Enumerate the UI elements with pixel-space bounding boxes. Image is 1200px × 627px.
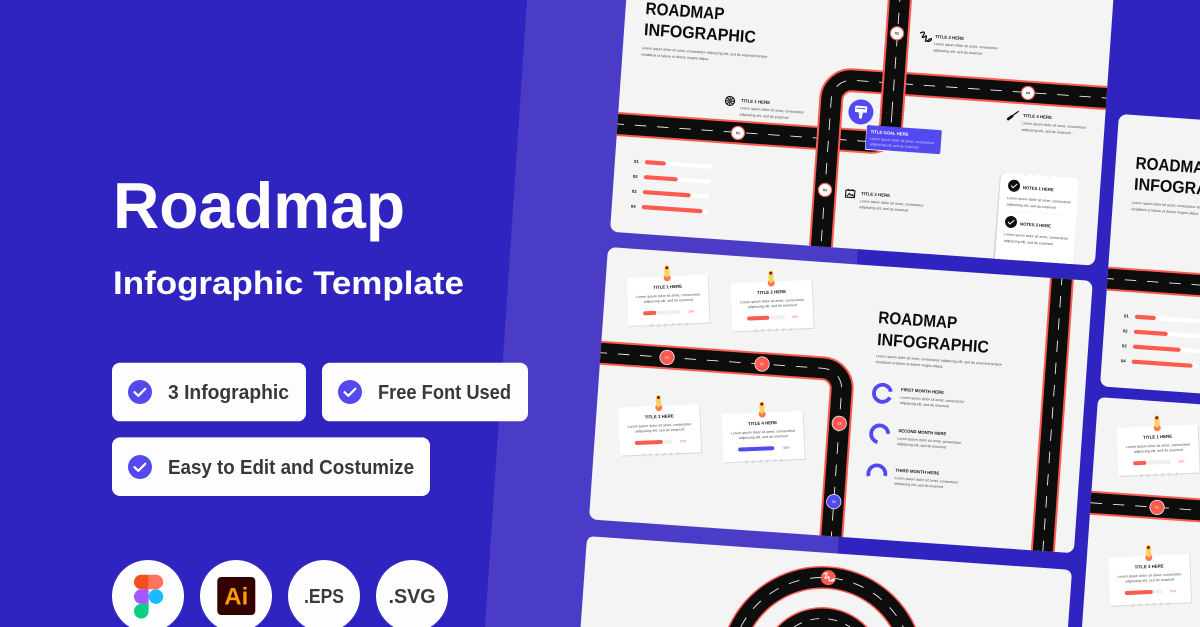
month 1: FIRST MONTH HERE (901, 387, 944, 395)
panel: slide two, curved road roadmap (583, 242, 1093, 570)
pin (758, 401, 766, 418)
item: title 4 (1007, 111, 1088, 136)
progress bars (631, 159, 712, 214)
card: title 1 copy: adipiscing elit, sed do eiusmod (1134, 448, 1183, 454)
note 1: Lorem ipsum dolor sit amet, consectetur (1007, 196, 1072, 204)
card: title 3 (618, 393, 702, 458)
note 1: NOTES 1 HERE (1023, 185, 1054, 192)
icon: brush (1008, 111, 1018, 120)
donut progress (873, 384, 891, 402)
icon: goal paint roller (848, 100, 874, 124)
item: title 1: TITLE 1 HERE (741, 98, 770, 105)
feature pill: Free Font Used: Free Font Used (378, 382, 511, 404)
pin (663, 265, 671, 281)
icon: EPS badge: .EPS (304, 586, 344, 608)
card: title 1 copy: 30% (1178, 459, 1185, 464)
road marker 03: 03 (837, 422, 841, 426)
item: title 3: adipiscing elit, sed do eiusmod (859, 205, 908, 212)
panel: slide three, circular road (581, 537, 1072, 627)
progress bars: 01 (1124, 313, 1129, 319)
month 3: adipiscing elit, sed do eiusmod (894, 482, 943, 489)
title: ROADMAP (878, 308, 958, 333)
road marker 04: 04 (832, 500, 836, 504)
progress bars: 02 (633, 174, 638, 179)
road marker 02 (754, 356, 770, 372)
progress bars: 04 (1121, 358, 1126, 364)
callout: title goal: Lorem ipsum dolor sit amet, consectetur (870, 137, 935, 145)
feature pill: Easy to Edit and Costumize (112, 437, 430, 496)
item: title 4: TITLE 4 HERE (1023, 113, 1052, 120)
icon: Figma badge (112, 560, 184, 627)
card: title 2 (730, 269, 815, 333)
month 2: Lorem ipsum dolor sit amet, consectetur (897, 436, 962, 445)
card: title 1: adipiscing elit, sed do eiusmod (644, 298, 693, 304)
card: title 1: 30% (688, 309, 695, 314)
pin (1145, 545, 1152, 561)
road marker 01 (731, 126, 745, 140)
card: title 3 copy: Lorem ipsum dolor sit amet, consectetur (1118, 572, 1182, 579)
feature pill: 3 Infographic (112, 363, 306, 421)
donut progress (871, 425, 889, 443)
item: title 4: Lorem ipsum dolor sit amet, consectetur (1022, 121, 1087, 130)
intro text (1131, 201, 1200, 220)
card: title 3: TITLE 3 HERE (645, 413, 674, 420)
item: title 4: adipiscing elit, sed do eiusmod (1021, 128, 1071, 135)
item: title 2 (919, 32, 999, 57)
feature pill: Easy to Edit and Costumize: Easy to Edit and Costumize (168, 457, 414, 479)
icon: brain (725, 96, 735, 106)
item: title 2: TITLE 2 HERE (935, 34, 964, 41)
road marker 02 (890, 26, 904, 40)
month 2 (870, 425, 963, 450)
road marker 01: 01 (736, 131, 740, 135)
note 1 (1006, 179, 1073, 211)
icon: Adobe Illustrator badge (200, 560, 272, 627)
road marker 04 (1021, 86, 1035, 100)
card: title 1 (626, 264, 711, 328)
month 3: THIRD MONTH HERE (895, 468, 940, 476)
title (1134, 157, 1200, 194)
card: title 3: Lorem ipsum dolor sit amet, consectetur (628, 422, 692, 429)
intro text: incididunt ut labore et dolore magna aliqua. (1131, 207, 1199, 216)
note 2: NOTES 2 HERE (1020, 221, 1051, 228)
outer ring road (728, 566, 916, 627)
item: title 3: Lorem ipsum dolor sit amet, consectetur (860, 199, 925, 208)
note 2: adipiscing elit, sed do eiusmod (1004, 239, 1053, 246)
intro text: Lorem ipsum dolor sit amet, consectetur adipiscing elit, sed do eiusmod tempor (642, 46, 769, 59)
card: title 1 copy: TITLE 1 HERE (1143, 434, 1172, 440)
callout: title goal: TITLE GOAL HERE (870, 129, 909, 137)
panel: slide four, crossroads copy (1100, 114, 1200, 394)
inner ring road (776, 607, 868, 627)
month 1 (873, 384, 966, 409)
road marker 01: 01 (665, 356, 669, 360)
card: title 4: adipiscing elit, sed do eiusmod (739, 434, 788, 440)
title: INFOGRAPHIC (643, 20, 757, 47)
donut progress (868, 465, 886, 477)
curved road (583, 352, 843, 553)
month 2: SECOND MONTH HERE (898, 428, 947, 436)
icon: SVG badge (376, 560, 448, 627)
item: title 1: Lorem ipsum dolor sit amet, consectetur (740, 106, 805, 115)
road marker 03: 03 (823, 188, 827, 192)
icon: SVG badge: .SVG (388, 586, 436, 608)
card: title 4 (721, 400, 806, 464)
feature pill: Free Font Used (322, 363, 528, 421)
card: title 4: Lorem ipsum dolor sit amet, consectetur (731, 429, 796, 435)
intro text: incididunt ut labore et dolore magna aliqua. (641, 53, 709, 61)
card: title 2: Lorem ipsum dolor sit amet, consectetur (740, 298, 805, 304)
item: title 1: adipiscing elit, sed do eiusmod (739, 112, 789, 120)
road marker 04 (826, 494, 841, 509)
card: title 3 copy: 70% (1170, 589, 1176, 593)
card: title 3: 70% (680, 439, 686, 443)
card: title 2: adipiscing elit, sed do eiusmod (748, 303, 797, 309)
road marker 02: 02 (895, 31, 899, 36)
subheading: Infographic Template: Infographic Template (113, 265, 464, 301)
road (1091, 503, 1200, 511)
card: title 3 copy: TITLE 3 HERE (1135, 563, 1164, 570)
intro text: incididunt ut labore et dolore magna aliqua. (875, 360, 944, 369)
item: title 1 (724, 96, 805, 121)
road marker 02: 02 (760, 362, 764, 366)
pin (655, 395, 662, 411)
road network (616, 0, 1108, 248)
feature pill: 3 Infographic: 3 Infographic (168, 382, 289, 404)
icon: Adobe Illustrator badge: Ai (224, 584, 248, 610)
title: INFOGRAPHIC (877, 330, 990, 357)
item: title 3: TITLE 3 HERE (861, 191, 890, 198)
progress bars (1121, 313, 1200, 369)
item: title 2: adipiscing elit, sed do eiusmod (933, 48, 982, 56)
card: title 2: 50% (792, 315, 799, 319)
road marker 03 (818, 183, 832, 197)
road marker 04: 04 (1026, 91, 1030, 95)
road (1103, 278, 1200, 293)
card: title 1: TITLE 1 HERE (653, 284, 682, 290)
month 2: adipiscing elit, sed do eiusmod (897, 442, 946, 449)
title (878, 311, 988, 353)
notes card (993, 173, 1078, 264)
progress bars: 02 (1123, 328, 1128, 334)
note 2 (1004, 216, 1070, 247)
card: title 3 copy: adipiscing elit, sed do eiusmod (1125, 577, 1174, 584)
road marker 01 (659, 350, 675, 365)
title (644, 2, 756, 43)
heading: Roadmap: Roadmap (113, 169, 405, 242)
card: title 2: TITLE 2 HERE (757, 289, 786, 295)
month 3 (868, 465, 960, 490)
icon: picture frame (845, 189, 855, 198)
callout: title goal: adipiscing elit, sed do eiusmod (870, 142, 919, 150)
card: title 4: 90% (783, 446, 790, 450)
month 3: Lorem ipsum dolor sit amet, consectetur (894, 476, 959, 485)
icon: EPS badge (288, 560, 360, 627)
callout: title goal (865, 125, 942, 155)
icon: squiggle (920, 32, 932, 42)
progress bars: 03 (632, 189, 637, 194)
month 1: Lorem ipsum dolor sit amet, consectetur (900, 395, 965, 404)
note 2: Lorem ipsum dolor sit amet, consectetur (1004, 232, 1069, 241)
panel: slide five, curved road copy (1082, 398, 1200, 627)
pin (1153, 415, 1161, 431)
road marker 01: 01 (1155, 506, 1159, 510)
card: title 4: TITLE 4 HERE (748, 420, 777, 426)
progress bars: 01 (634, 159, 639, 164)
card: title 1 copy (1116, 414, 1200, 478)
pin (767, 270, 775, 287)
straight road (1042, 274, 1062, 568)
item: title 2: Lorem ipsum dolor sit amet, consectetur (934, 42, 999, 50)
card: title 3 copy (1108, 543, 1192, 608)
intro text: Lorem ipsum dolor sit amet, consectetur adipiscing elit, sed do eiusmod tempor (876, 354, 1003, 367)
road marker: squiggle (821, 570, 836, 585)
month 1: adipiscing elit, sed do eiusmod (900, 401, 949, 408)
progress bars: 04 (631, 204, 636, 209)
road marker 01 (1149, 500, 1165, 515)
note 1: adipiscing elit, sed do eiusmod (1006, 202, 1056, 210)
progress bars: 03 (1122, 343, 1127, 349)
item: title 3 (845, 189, 925, 214)
panel: slide one, crossroads roadmap (610, 0, 1114, 266)
road marker 03 (832, 416, 847, 431)
card: title 1 copy: Lorem ipsum dolor sit amet, consectetur (1126, 442, 1191, 449)
card: title 3: adipiscing elit, sed do eiusmod (635, 427, 684, 434)
card: title 1: Lorem ipsum dolor sit amet, consectetur (636, 292, 701, 299)
